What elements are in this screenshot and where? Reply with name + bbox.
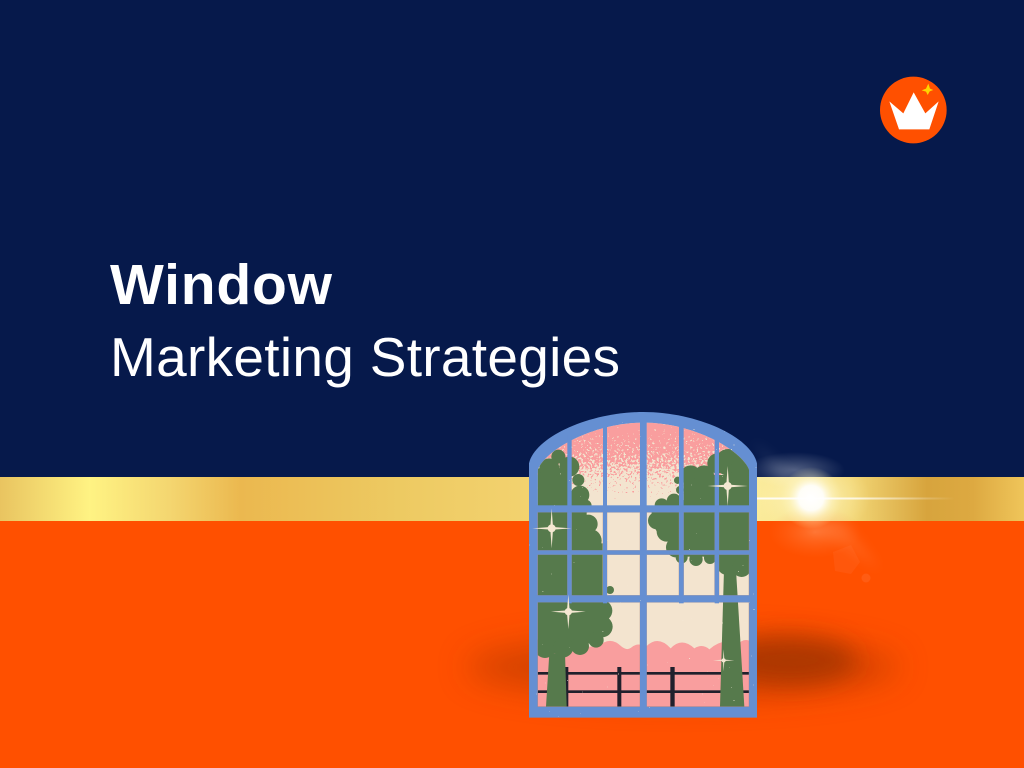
pink hedge bbox=[538, 640, 749, 707]
pane edges bbox=[538, 512, 749, 707]
window mullions bbox=[535, 417, 752, 710]
logo circle bbox=[880, 77, 947, 143]
orange floor bbox=[0, 521, 1024, 768]
floor shadow bbox=[467, 636, 899, 697]
star bbox=[922, 84, 933, 95]
window dust specks bbox=[529, 412, 757, 718]
window frame bbox=[529, 412, 757, 718]
pink speckled canopy bbox=[538, 420, 749, 503]
subtitle line: Marketing Strategies: Marketing Strategies bbox=[110, 326, 620, 388]
sky bbox=[538, 420, 749, 707]
crown bbox=[889, 92, 939, 129]
gold band bbox=[0, 477, 1024, 521]
fence bbox=[538, 667, 749, 707]
window illustration bbox=[529, 412, 757, 718]
right tree bbox=[648, 449, 751, 707]
title bbox=[110, 253, 620, 388]
logo: crown badge bbox=[880, 77, 947, 143]
title line: Window: Window bbox=[110, 253, 333, 317]
navy background bbox=[0, 0, 1024, 478]
lens flare bbox=[756, 454, 949, 582]
left tree bbox=[534, 450, 614, 707]
outdoor scene bbox=[534, 420, 751, 707]
sparkles bbox=[532, 466, 748, 671]
